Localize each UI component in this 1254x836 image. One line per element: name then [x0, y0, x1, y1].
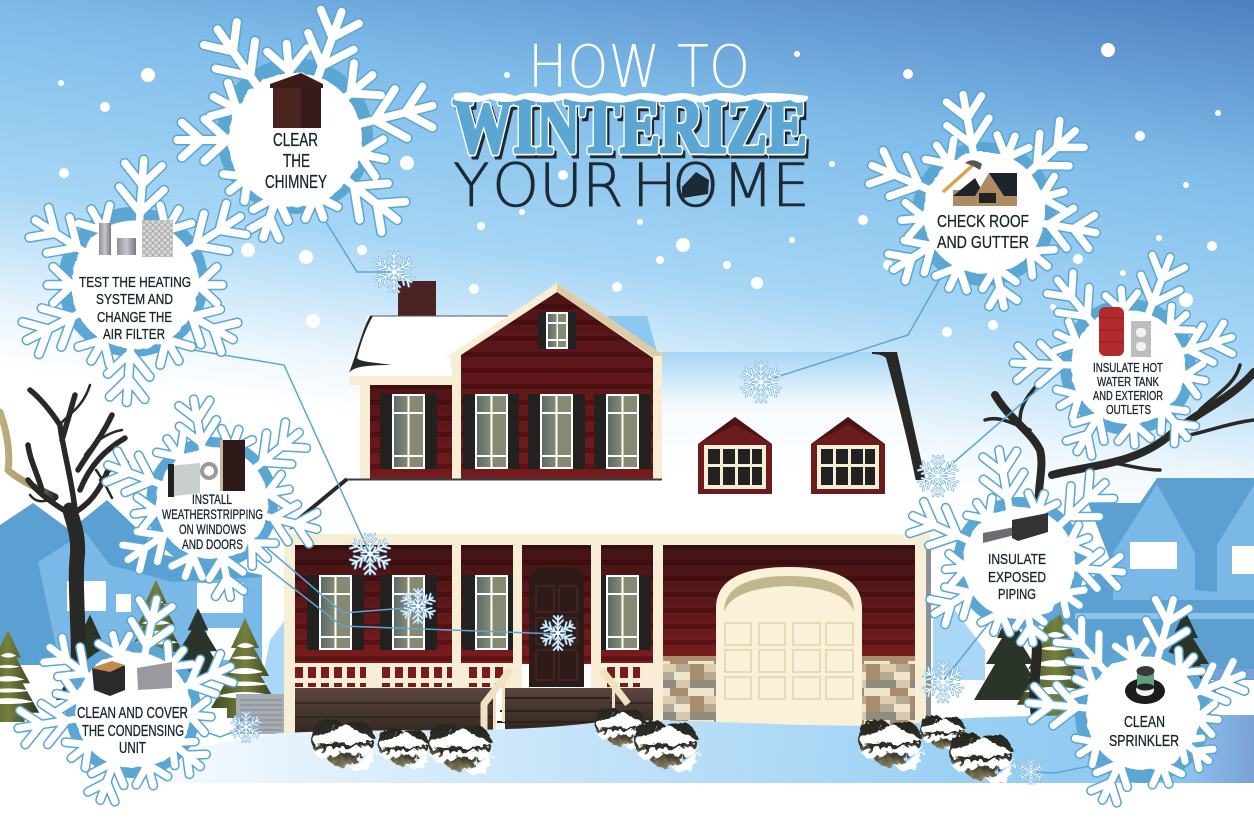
- main gable wall: [445, 283, 668, 480]
- label: insulate exposed piping: EXPOSED: [988, 569, 1046, 586]
- icon: insulated pipe: [983, 513, 1048, 543]
- label: test the heating system and change the air filter: [79, 274, 191, 343]
- connector lines: [187, 217, 1095, 773]
- title line: how to: HOW TO: [528, 32, 750, 101]
- title line: your home: YOUR HOME: [0, 151, 810, 221]
- porch railing: [295, 663, 663, 688]
- falling snow dots: [58, 43, 1221, 337]
- upper left wing wall: [349, 376, 452, 480]
- label: test the heating system and change the air filter: CHANGE THE: [97, 309, 172, 326]
- white foreground snow: [0, 783, 1254, 836]
- badge: test the heating system: [17, 158, 252, 404]
- house: [284, 281, 932, 736]
- badge: clean and cover the condensing unit: [15, 595, 238, 806]
- icon: sprinkler head: [1125, 666, 1165, 704]
- badge: insulate exposed piping: [905, 446, 1124, 645]
- label: install weatherstripping on windows and doors: INSTALL: [192, 491, 232, 507]
- downspout: [926, 544, 931, 722]
- label: clear the chimney: [265, 130, 327, 192]
- background house right: [1060, 478, 1254, 680]
- label: insulate hot water tank and exterior outlets: WATER TANK: [1097, 375, 1160, 389]
- title line: winterize: WINTERIZE: [453, 82, 807, 169]
- gable attic window: [538, 312, 576, 349]
- pale blue snow mounds beside house: [262, 610, 985, 700]
- dormer window right: [811, 417, 885, 494]
- label: install weatherstripping on windows and doors: WEATHERSTRIPPING: [162, 506, 263, 522]
- dormer window left: [698, 417, 772, 494]
- front door: [529, 567, 584, 687]
- label: clear the chimney: CHIMNEY: [265, 172, 327, 192]
- chimney on the roof: [398, 281, 436, 317]
- icon: furnace, water heater and air filter: [99, 220, 173, 257]
- icon: window, weatherstrip roll and door: [168, 440, 245, 497]
- label: check roof and gutter: AND GUTTER: [937, 232, 1029, 252]
- big right roof with snow: [655, 352, 926, 482]
- badge: clean sprinkler: [1027, 594, 1249, 807]
- label: test the heating system and change the air filter: AIR FILTER: [103, 326, 165, 343]
- label: clean and cover the condensing unit: THE CONDENSING: [82, 723, 184, 740]
- label: insulate hot water tank and exterior outlets: OUTLETS: [1106, 403, 1151, 417]
- blue roof sliver behind gable: [607, 316, 657, 352]
- label: insulate exposed piping: PIPING: [998, 586, 1036, 603]
- icon: wrapped tank and outlet: [1099, 307, 1151, 357]
- pine trees right: [974, 604, 1221, 716]
- garage door: [716, 567, 862, 732]
- porch windows with shutters: [307, 575, 651, 650]
- upper floor windows with shutters: [380, 394, 651, 469]
- location markers: small snowflakes: [231, 252, 1043, 784]
- icon: house inside the letter O: [682, 172, 709, 198]
- icon: hammer and house roof: [943, 160, 1017, 206]
- label: test the heating system and change the air filter: TEST THE HEATING: [79, 274, 191, 291]
- background house left: [0, 500, 262, 665]
- label: insulate hot water tank and exterior outlets: [1093, 361, 1163, 417]
- label: clean and cover the condensing unit: UNIT: [119, 740, 146, 757]
- bare tree right: [985, 365, 1254, 716]
- porch wall: [295, 544, 915, 664]
- deck skirt: [295, 688, 653, 736]
- badge: clear the chimney: [178, 4, 439, 243]
- bare tree left: [0, 385, 128, 700]
- badge: insulate hot water tank: [1013, 250, 1237, 460]
- snowy shrubs: [310, 708, 1015, 785]
- garage stone wall: [663, 656, 915, 728]
- label: insulate hot water tank and exterior outlets: INSULATE HOT: [1093, 361, 1163, 375]
- label: check roof and gutter: CHECK ROOF: [937, 211, 1029, 231]
- label: insulate exposed piping: [988, 551, 1046, 603]
- badge: install weatherstripping: [101, 396, 321, 600]
- front stairs with handrails: [484, 669, 628, 732]
- title: [0, 32, 810, 221]
- snowy ground: [0, 715, 1254, 783]
- label: clear the chimney: THE: [283, 151, 310, 171]
- badge: check roof and gutter: [864, 91, 1099, 310]
- condensing unit beside the house: [236, 694, 284, 734]
- label: clear the chimney: CLEAR: [273, 130, 318, 150]
- label: insulate hot water tank and exterior outlets: AND EXTERIOR: [1093, 389, 1163, 403]
- label: check roof and gutter: [937, 211, 1029, 252]
- label: clean sprinkler: [1109, 714, 1179, 750]
- porch beam and posts: [284, 534, 930, 734]
- label: install weatherstripping on windows and doors: AND DOORS: [182, 536, 243, 552]
- label: clean sprinkler: CLEAN: [1124, 714, 1165, 731]
- lower roof with snow: [288, 479, 932, 534]
- label: clean and cover the condensing unit: [77, 705, 188, 757]
- label: clean and cover the condensing unit: CLEAN AND COVER: [77, 705, 188, 722]
- label: clean sprinkler: SPRINKLER: [1109, 733, 1179, 750]
- pine trees left: [0, 580, 279, 722]
- label: install weatherstripping on windows and doors: ON WINDOWS: [179, 521, 246, 537]
- label: test the heating system and change the air filter: SYSTEM AND: [96, 291, 173, 308]
- icon: chimney: [270, 73, 323, 128]
- icon: condensing unit and cover: [91, 661, 172, 696]
- label: insulate exposed piping: INSULATE: [988, 551, 1046, 568]
- label: install weatherstripping on windows and doors: [162, 491, 263, 552]
- upper left roof snow: [348, 316, 510, 376]
- title line: winterize: WINTERIZE: [453, 82, 807, 169]
- title line: winterize: WINTERIZE: [456, 86, 810, 173]
